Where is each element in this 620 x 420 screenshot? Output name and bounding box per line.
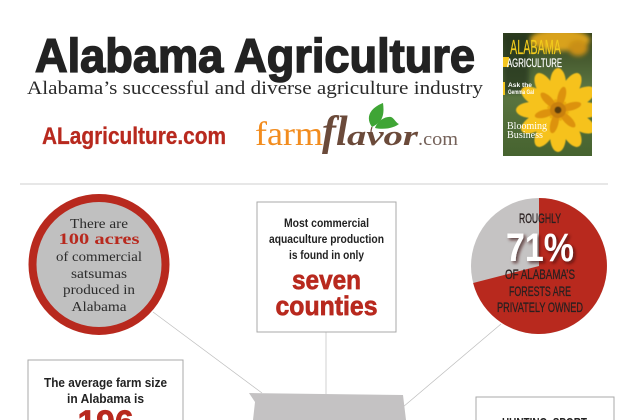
magazine cover: Business [507, 130, 543, 141]
panel: satsumas circle: Alabama [72, 299, 127, 314]
panel: hunting sport box [476, 397, 614, 420]
panel: satsumas circle: produced in [63, 282, 135, 297]
icon: sunflower [516, 68, 600, 152]
title: Alabama Agriculture [35, 29, 475, 82]
website link: ALagriculture.com: ALagriculture.com [42, 123, 226, 150]
chart: forest ownership pie: ROUGHLY [519, 210, 561, 226]
panel: satsumas circle: satsumas [71, 266, 127, 281]
logo: farmflavor.com: .com [418, 129, 458, 150]
panel: satsumas circle: of commercial [56, 249, 142, 264]
panel: aquaculture box: seven [292, 265, 361, 295]
logo: farmflavor.com: avor [347, 120, 419, 152]
panel: satsumas circle: 100 acres [58, 231, 140, 248]
icon: background flower [530, 29, 590, 56]
magazine cover: Ask the [508, 83, 533, 89]
panel: satsumas circle: There are [70, 216, 128, 231]
panel: average farm size box: in Alabama is [67, 392, 144, 406]
panel: satsumas circle [32, 198, 166, 331]
panel: aquaculture box: aquaculture production [269, 232, 384, 246]
panel: average farm size box [28, 360, 183, 420]
panel: aquaculture box: is found in only [289, 248, 364, 262]
chart: forest ownership pie [471, 198, 607, 334]
magazine cover: ALABAMA [510, 37, 561, 59]
map of Alabama [249, 393, 406, 420]
logo: farmflavor.com [255, 103, 458, 155]
magazine cover [503, 33, 592, 156]
logo: farmflavor.com: farm [255, 116, 323, 153]
magazine cover: Gemma Gal [508, 90, 534, 96]
chart: forest ownership pie: FORESTS ARE [509, 283, 571, 299]
panel: average farm size box: The average farm size [44, 376, 167, 390]
logo: farmflavor.com: fl [322, 109, 348, 155]
panel: aquaculture box: counties [276, 291, 378, 321]
chart: forest ownership pie: 71% [506, 226, 574, 270]
panel: aquaculture box: Most commercial [284, 216, 369, 230]
panel: aquaculture box [257, 202, 396, 332]
subtitle: Alabama’s successful and diverse agriculture industry [27, 78, 484, 99]
magazine cover: Blooming [507, 121, 547, 132]
magazine cover: AGRICULTURE [507, 56, 562, 70]
chart: forest ownership pie: OF ALABAMA’S [505, 266, 575, 282]
